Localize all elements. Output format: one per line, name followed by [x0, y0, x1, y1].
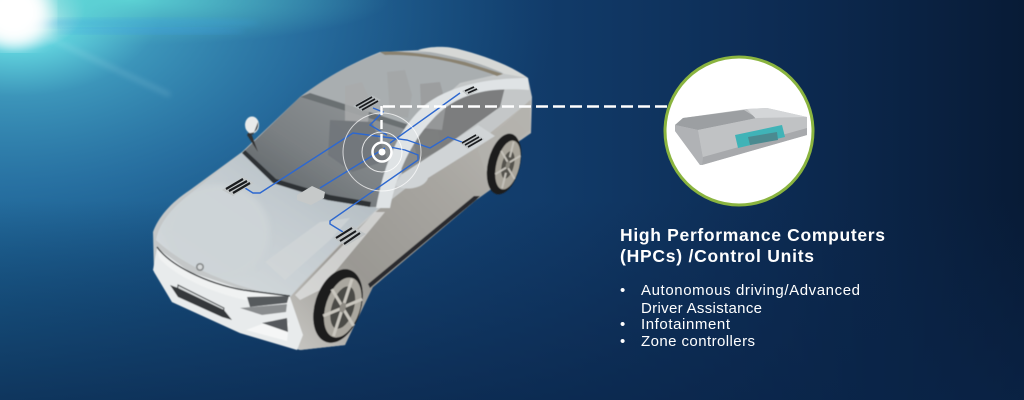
header bar — [300, 93, 410, 130]
hood inner shape — [234, 192, 260, 212]
module rear top — [462, 86, 479, 96]
seats — [328, 70, 446, 178]
hood — [156, 153, 378, 297]
headlight — [247, 296, 289, 307]
rear wheel — [481, 130, 527, 198]
hood badge — [196, 263, 204, 271]
hood edge line — [157, 247, 290, 296]
rear roof spoiler — [418, 47, 528, 78]
rear quarter highlight — [478, 100, 530, 185]
front bumper — [153, 248, 303, 350]
door sill band — [395, 125, 495, 189]
bullet item: autonomous driving: Driver Assistance — [641, 300, 762, 317]
dashed connector — [382, 106, 668, 148]
heading: (HPCs) /Control Units — [620, 246, 814, 266]
cowl — [242, 150, 371, 207]
grille plate — [177, 285, 224, 316]
central unit — [297, 186, 325, 205]
module front left — [222, 177, 254, 196]
bullet item: autonomous driving — [620, 282, 860, 317]
fender highlight — [295, 212, 385, 300]
bullet item: autonomous driving: Autonomous driving/Advanced — [641, 282, 860, 299]
target rings — [343, 113, 421, 191]
bullet item: zone controllers: Zone controllers — [641, 333, 755, 350]
engine bay block — [265, 218, 350, 280]
product circle — [665, 57, 813, 205]
lens flare — [0, 0, 260, 95]
windshield — [242, 97, 407, 207]
module front right — [333, 226, 366, 246]
bullet item: infotainment: • — [620, 316, 625, 333]
bullet item: autonomous driving: • — [620, 282, 625, 299]
heading: High Performance Computers — [620, 225, 885, 245]
bullet list — [620, 282, 860, 350]
heading — [620, 225, 885, 266]
module rear side — [460, 134, 484, 149]
roof glass — [300, 52, 503, 130]
control unit product — [675, 108, 807, 165]
rear interior glass — [410, 87, 505, 160]
side panel — [290, 100, 531, 350]
teal connector — [735, 125, 785, 148]
fascia band — [157, 248, 290, 304]
bullet item: zone controllers: • — [620, 333, 625, 350]
control modules — [222, 86, 484, 246]
wiring — [245, 93, 470, 232]
A pillar arc — [376, 78, 529, 208]
side sill — [368, 196, 480, 288]
front wheel — [304, 263, 372, 349]
left mirror — [245, 116, 259, 152]
car — [153, 47, 532, 350]
car body outline — [153, 48, 532, 350]
bullet item: infotainment: Infotainment — [641, 316, 731, 333]
module cabin — [353, 95, 381, 111]
